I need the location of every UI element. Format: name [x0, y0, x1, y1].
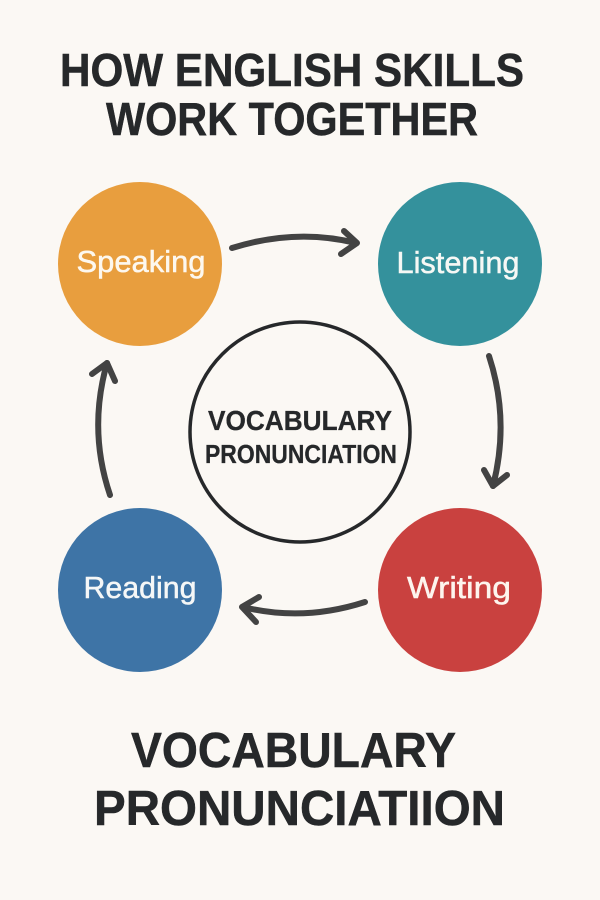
center circle: VOCABULARY: [208, 405, 392, 436]
arrow: Reading to Speaking: [92, 363, 115, 495]
bottom text: [94, 724, 505, 836]
circle: Listening: [378, 182, 542, 346]
bottom text: VOCABULARY: [131, 724, 456, 778]
circle: Reading: Reading: [84, 570, 196, 605]
circle: Writing: Writing: [407, 570, 511, 605]
circle: Speaking: Speaking: [76, 244, 206, 279]
circle: Reading: [58, 508, 222, 672]
title: HOW ENGLISH SKILLS: [60, 44, 524, 96]
center circle: PRONUNCIATION: [205, 441, 397, 469]
arrow: Listening to Writing: [484, 356, 507, 486]
circle: Speaking: [58, 182, 222, 346]
circle: Writing: [378, 508, 542, 672]
arrow: Speaking to Listening: [232, 231, 357, 254]
circle: Listening: Listening: [396, 245, 520, 280]
arrow: Writing to Reading: [242, 597, 365, 622]
center circle: [190, 322, 410, 542]
title: WORK TOGETHER: [106, 93, 478, 145]
title: [60, 44, 524, 145]
bottom text: PRONUNCIATIION: [94, 782, 505, 836]
